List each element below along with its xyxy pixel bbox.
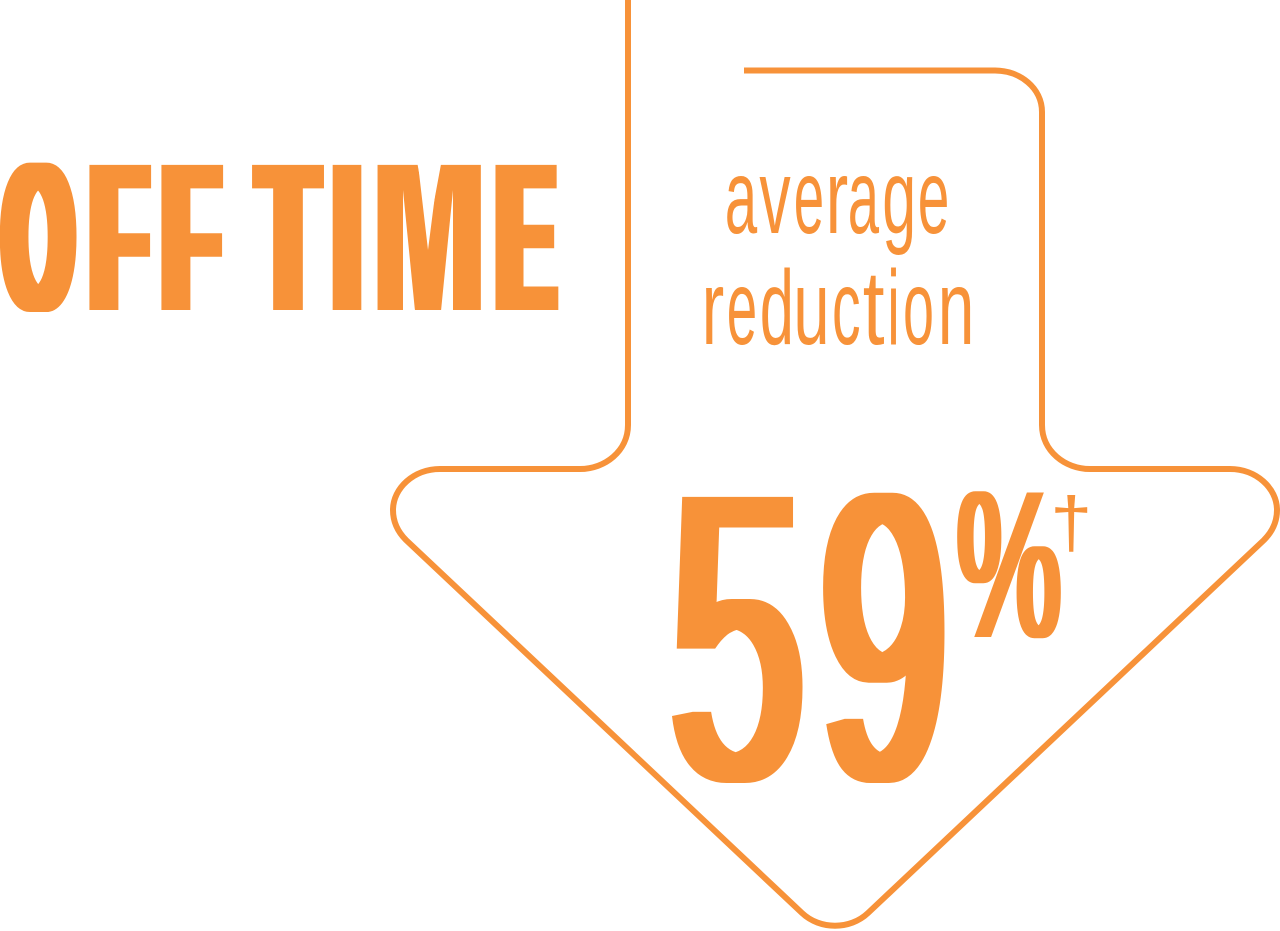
label: average reduction: e <box>918 138 949 256</box>
label: average reduction: a <box>725 138 757 256</box>
heading: off time: I <box>335 119 359 355</box>
infographic canvas: E <box>498 119 554 355</box>
statistic: 59 percent: % <box>957 447 1061 682</box>
heading: off time: F <box>163 119 218 355</box>
statistic: 59 percent: 9 <box>822 408 946 866</box>
statistic: 59 percent: † <box>1050 484 1092 563</box>
label: average reduction: v <box>759 138 791 256</box>
label: average reduction: u <box>793 249 830 367</box>
label: average reduction: o <box>903 249 934 367</box>
heading: off time <box>4 119 554 355</box>
label: average reduction: i <box>887 249 900 367</box>
label: average reduction: r <box>826 138 848 256</box>
statistic: 59 percent: 5 <box>672 408 804 866</box>
label: average reduction: a <box>848 138 879 256</box>
heading: off time: O <box>4 119 72 355</box>
label: average reduction <box>702 138 974 367</box>
label: average reduction: c <box>832 249 861 367</box>
label: average reduction: t <box>863 249 885 367</box>
statistic: 59 percent <box>672 408 1092 866</box>
arrow outline <box>393 0 1277 926</box>
heading: off time: T <box>259 119 317 355</box>
label: average reduction: d <box>760 249 794 367</box>
label: average reduction: e <box>727 249 757 367</box>
heading: off time: F <box>91 119 146 355</box>
label: average reduction: g <box>882 138 916 256</box>
heading: off time: M <box>377 119 481 355</box>
label: average reduction: r <box>702 249 724 367</box>
label: average reduction: n <box>938 249 974 367</box>
label: average reduction: e <box>794 138 824 256</box>
